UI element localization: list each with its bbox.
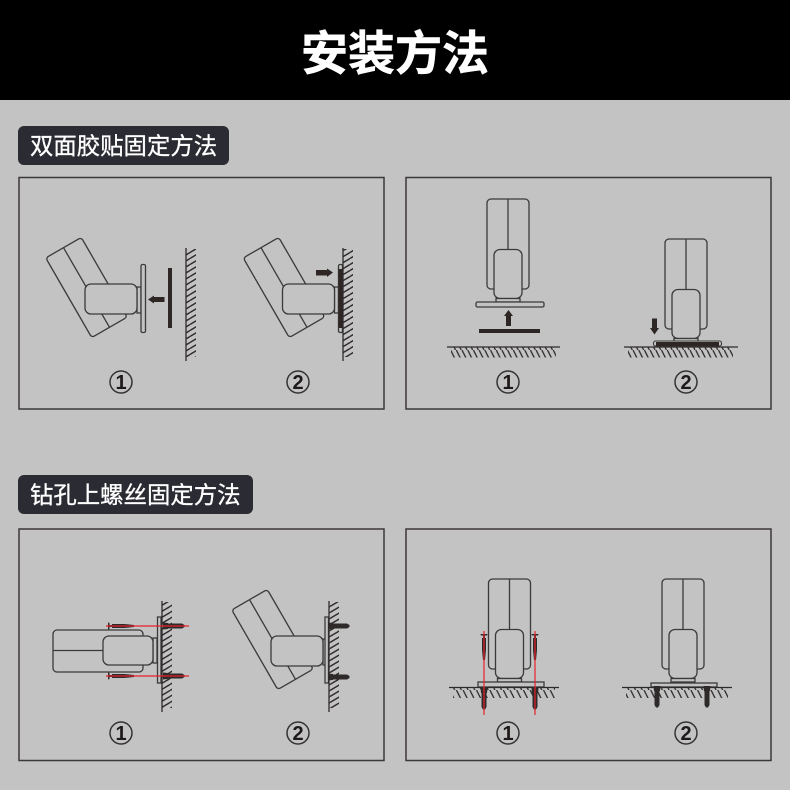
step 2 screws [328, 622, 350, 680]
number 1 [497, 722, 519, 745]
step 2 lamp [232, 589, 327, 690]
step 2 ground [622, 688, 732, 698]
step 1 plate [478, 682, 544, 687]
step 2 wall [329, 601, 339, 712]
step 2 lamp [665, 239, 707, 342]
number 2 [287, 722, 309, 745]
number 1 [110, 722, 132, 745]
step 1 ground [447, 347, 560, 358]
panel: screws on wall [19, 529, 384, 760]
panel: screws on floor [406, 529, 771, 760]
number 2: 2 [680, 372, 692, 394]
heading: drilled screw method [18, 475, 253, 514]
step 1 mounting plate [141, 264, 146, 332]
title [0, 0, 790, 100]
arrow: towards wall [316, 268, 333, 277]
step 2 plate with tape [338, 264, 342, 332]
panel: tape on floor [406, 178, 771, 409]
step 1 tape [168, 268, 172, 328]
number 1: 1 [502, 372, 514, 394]
step 1 plate [476, 302, 544, 307]
arrow: tape to plate [148, 296, 164, 304]
title: 安装方法 [301, 27, 489, 80]
step 1 lamp [488, 579, 530, 682]
step 2 wall [343, 248, 353, 361]
step 1 tape [479, 329, 540, 333]
step 2 lamp [243, 237, 338, 338]
heading: drilled screw method: 钻孔上螺丝固定方法 [30, 482, 241, 508]
step 2 ground [624, 347, 738, 358]
heading: double-sided tape method: 双面胶贴固定方法 [30, 133, 217, 159]
number 1: 1 [115, 372, 127, 394]
number 2 [675, 722, 697, 745]
step 1 screws and guide lines [106, 622, 189, 680]
arrow: up [504, 310, 513, 326]
heading: double-sided tape method [18, 126, 229, 165]
number 1: 1 [502, 723, 514, 745]
number 2: 2 [292, 723, 304, 745]
number 1 [497, 371, 519, 394]
step 1 lamp [487, 199, 529, 302]
step 1 screws and guide lines [480, 631, 538, 715]
step 2 plate [325, 617, 328, 683]
step 1 lamp [53, 617, 161, 683]
arrow: down [650, 318, 659, 334]
panel: tape on wall [19, 178, 384, 409]
step 1 wall [186, 248, 196, 361]
number 1: 1 [115, 723, 127, 745]
step 2 plate [651, 683, 717, 687]
step 2 screws [654, 686, 710, 708]
number 2 [675, 371, 697, 394]
step 1 lamp [46, 237, 141, 338]
number 1 [110, 371, 132, 394]
step 2 lamp [662, 579, 704, 682]
number 2: 2 [680, 723, 692, 745]
step 1 ground [449, 688, 559, 698]
step 2 plate with tape [654, 341, 722, 346]
number 2: 2 [292, 372, 304, 394]
number 2 [287, 371, 309, 394]
step 1 wall [162, 601, 172, 712]
